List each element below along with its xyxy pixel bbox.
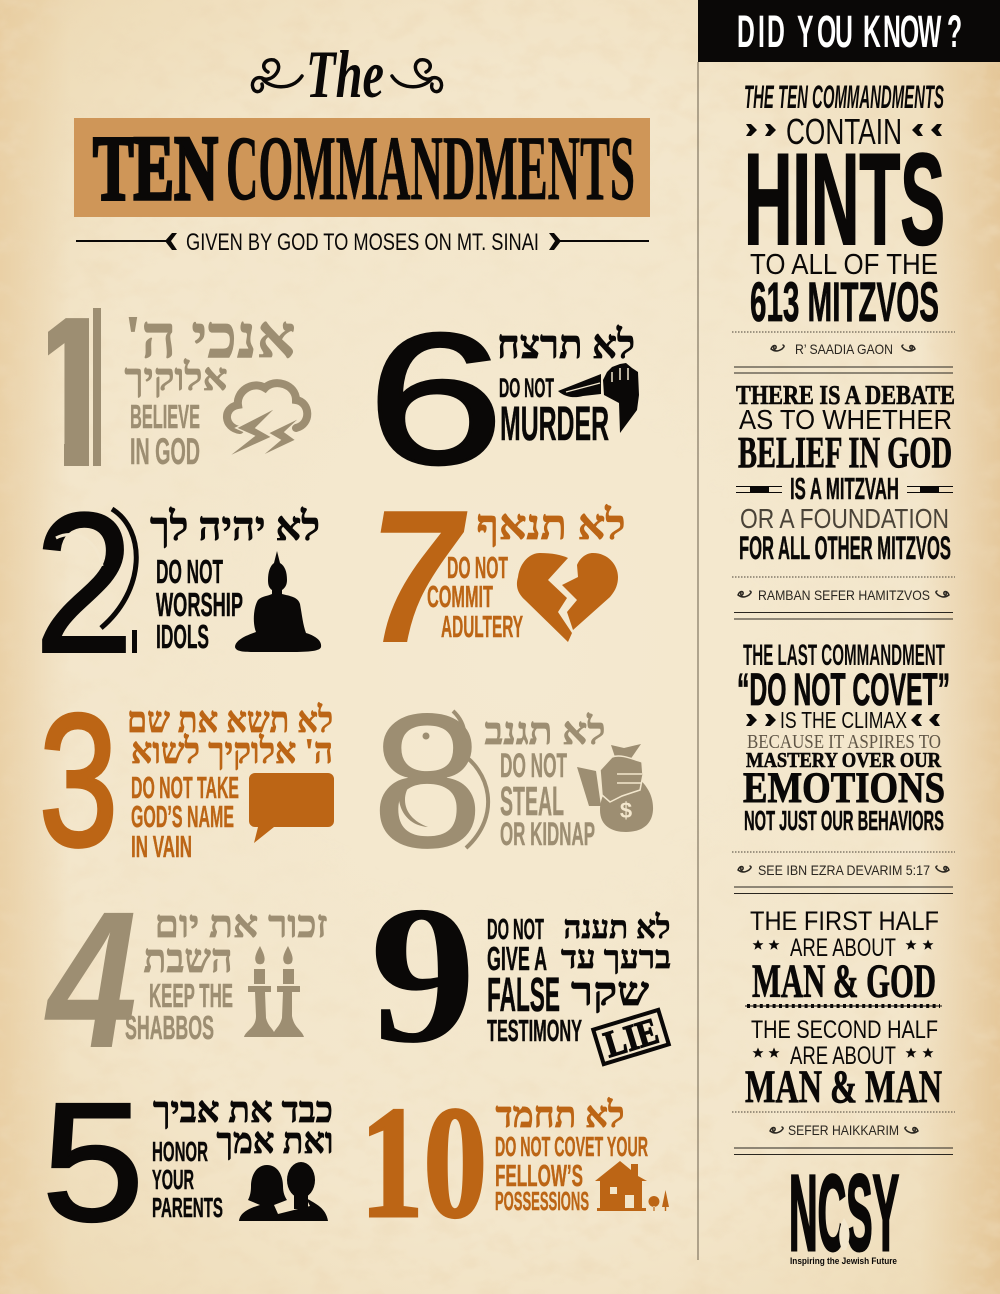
numeral 2: 2 <box>34 472 134 695</box>
label: IN VAIN <box>131 829 192 864</box>
label: POSSESSIONS <box>495 1186 589 1216</box>
label: DO NOT <box>500 747 567 785</box>
label: COMMIT <box>427 579 493 614</box>
to all of the: TO ALL OF THE <box>750 249 938 281</box>
numeral 10: 10 <box>360 1073 487 1251</box>
hebrew: לא תשא את שם <box>127 700 333 740</box>
label in god: IN GOD <box>130 431 200 472</box>
as to whether: AS TO WHETHER <box>739 404 952 435</box>
subtitle with rules: GIVEN BY GOD TO MOSES ON MT. SINAI <box>186 229 539 256</box>
sidebar fact 3 <box>732 639 955 894</box>
are about with stars: ARE ABOUT <box>790 934 896 962</box>
hebrew line 2: אלוקיך <box>124 357 228 399</box>
is the climax with chevrons: IS THE CLIMAX <box>780 707 907 733</box>
label: SHABBOS <box>125 1009 214 1046</box>
label: DO NOT COVET YOUR <box>495 1131 648 1162</box>
hebrew: זכור את יום <box>154 904 328 946</box>
hebrew: לא תנאף <box>476 503 626 549</box>
logo: NCSY <box>789 1152 899 1273</box>
commandment 10 <box>360 1073 669 1251</box>
label: OR KIDNAP <box>500 816 595 852</box>
source line <box>732 852 955 894</box>
commandment 1 <box>48 308 312 466</box>
hebrew: לא יהיה לך <box>150 504 320 549</box>
icon: hand with money bag: $ <box>620 798 632 823</box>
numeral 7: 7 <box>369 471 468 683</box>
label: GIVE A <box>487 940 547 977</box>
icon: hand with money bag <box>577 744 653 832</box>
label: WORSHIP <box>156 586 243 623</box>
commandment 8 <box>371 673 653 888</box>
icon: storm cloud <box>226 383 307 458</box>
source line: RAMBAN SEFER HAMITZVOS <box>758 587 930 603</box>
commandment 7 <box>369 471 626 683</box>
hebrew: לא תגנב <box>484 711 606 753</box>
icon: speech bubble <box>249 773 334 843</box>
hebrew line 3: שקר <box>571 969 650 1014</box>
source line: R’ SAADIA GAON <box>795 341 893 357</box>
icon: buddha <box>235 551 321 652</box>
icon: parents silhouettes <box>239 1162 328 1221</box>
hebrew: לא תחמד <box>496 1095 624 1135</box>
there is a debate: THERE IS A DEBATE <box>736 380 955 410</box>
label: FELLOW’S <box>495 1158 583 1193</box>
commandment 6 <box>367 296 639 503</box>
emotions: EMOTIONS <box>743 765 945 812</box>
sidebar fact 4 <box>732 906 955 1155</box>
sidebar divider <box>698 62 699 1260</box>
label: DO NOT TAKE <box>131 770 239 805</box>
label: IDOLS <box>156 618 209 655</box>
mastery over our: MASTERY OVER OUR <box>746 748 942 772</box>
are about with stars: ARE ABOUT <box>790 1042 896 1070</box>
hebrew line 2: ה' אלוקיך לשוא <box>131 731 333 771</box>
numeral 1 <box>48 308 101 466</box>
diamond line <box>745 1004 942 1008</box>
commandment 7: ADULTERY <box>441 609 523 644</box>
title: TEN: TEN <box>93 117 218 219</box>
icon: candlesticks <box>244 946 304 1037</box>
did you know header <box>698 0 1000 62</box>
label: PARENTS <box>152 1192 223 1223</box>
label: YOUR <box>152 1164 194 1195</box>
label: DO NOT <box>447 550 508 585</box>
numeral 8: 8 <box>371 673 484 888</box>
hebrew: לא תרצח <box>497 322 635 367</box>
label: MURDER <box>500 398 609 451</box>
because it aspires to: BECAUSE IT ASPIRES TO <box>747 731 941 753</box>
title: The with flourishes: The <box>306 36 384 112</box>
source line <box>732 1112 955 1155</box>
label: GOD’S NAME <box>131 799 234 834</box>
commandment 5 <box>42 1068 334 1256</box>
tagline: Inspiring the Jewish Future <box>790 1256 897 1267</box>
commandment 4 <box>44 871 327 1089</box>
the first half: THE FIRST HALF <box>750 906 939 936</box>
or a foundation: OR A FOUNDATION <box>740 503 949 534</box>
hebrew line 2: השבת <box>144 936 232 981</box>
label: HONOR <box>152 1136 208 1167</box>
numeral 5: 5 <box>42 1068 144 1256</box>
label: DO NOT <box>499 373 554 403</box>
commandment 9 <box>370 865 671 1084</box>
icon: fist with knife <box>558 363 639 433</box>
commandment 2 <box>34 472 321 695</box>
hebrew: כבד את אביך <box>153 1090 333 1130</box>
hebrew: לא תענה <box>564 909 670 945</box>
numeral 9: 9 <box>370 865 476 1084</box>
commandment 3 <box>39 675 334 885</box>
source line: SEFER HAIKKARIM <box>788 1122 899 1138</box>
icon: lie stamp: LIE <box>600 1011 663 1066</box>
source line: SEE IBN EZRA DEVARIM 5:17 <box>758 862 930 878</box>
label: KEEP THE <box>149 977 233 1014</box>
sidebar fact 1 <box>732 79 955 374</box>
label: DO NOT <box>156 553 223 590</box>
contain with chevrons: CONTAIN <box>786 111 902 152</box>
numeral 1: 1 <box>22 271 122 512</box>
hebrew line 2: ברעך עד <box>561 939 671 975</box>
is a mitzvah with ornaments <box>736 471 953 506</box>
hebrew: אנכי ה' <box>124 304 296 370</box>
numeral 6: 6 <box>367 296 504 503</box>
numeral 3: 3 <box>39 675 118 885</box>
icon: broken heart <box>517 553 618 642</box>
source line <box>732 577 955 620</box>
label: TESTIMONY <box>487 1013 582 1048</box>
is a mitzvah with ornaments: IS A MITZVAH <box>790 471 899 506</box>
sidebar fact 2 <box>732 380 955 620</box>
commandment 8: STEAL <box>500 778 564 824</box>
source line <box>732 332 955 374</box>
commandment 1: BELIEVE <box>130 398 200 435</box>
label: DO NOT <box>487 914 544 946</box>
title banner <box>74 118 650 217</box>
did you know header: DID YOU KNOW? <box>737 6 962 57</box>
icon: house and trees <box>595 1161 669 1211</box>
the second half: THE SECOND HALF <box>751 1016 938 1044</box>
hebrew line 2: ואת אמך <box>216 1121 334 1161</box>
title block <box>74 36 650 256</box>
commandment 9: FALSE <box>487 969 560 1022</box>
numeral 4: 4 <box>44 871 137 1089</box>
title: The with flourishes <box>252 36 442 112</box>
